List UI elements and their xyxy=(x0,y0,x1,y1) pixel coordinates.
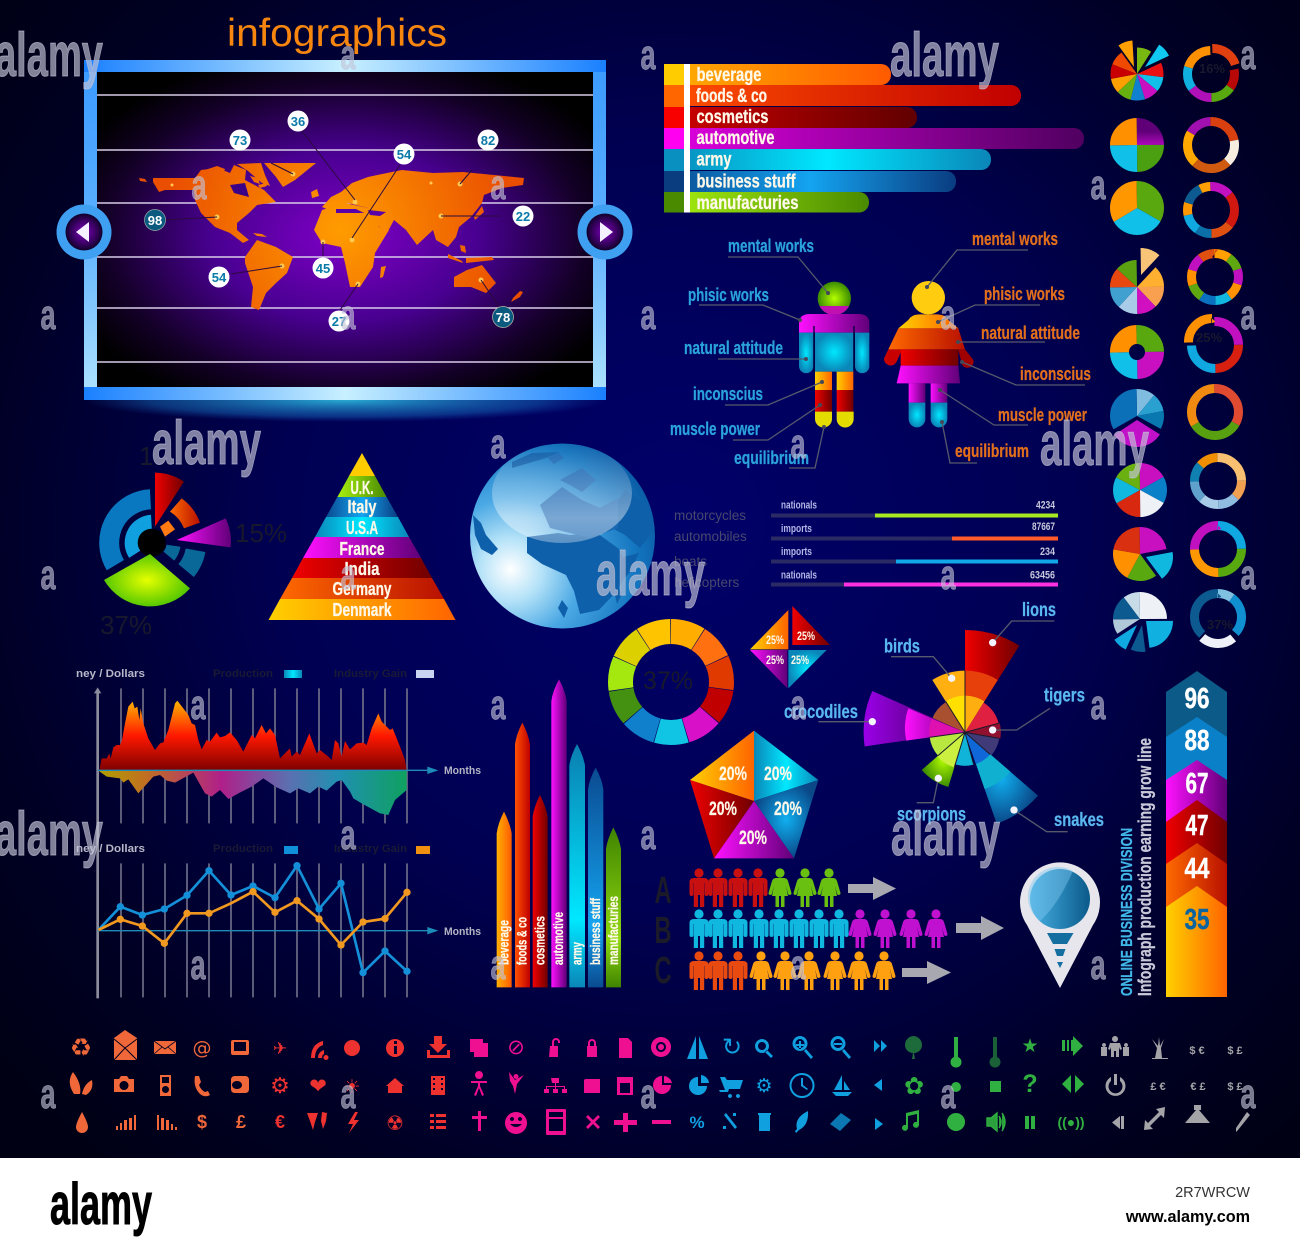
badges: 82 xyxy=(481,133,495,148)
diamond chart: 25% xyxy=(766,653,784,667)
pyramid chart: Germany xyxy=(332,579,392,599)
icon: dollar pound: $ £ xyxy=(1227,1045,1243,1057)
pyramid chart: India xyxy=(344,559,380,579)
donut 5: 25% xyxy=(1196,330,1222,345)
icon: document xyxy=(619,1038,632,1058)
icon: arrow right xyxy=(1062,1036,1083,1056)
watermarks: a xyxy=(1240,291,1256,338)
progress bars: helicopters xyxy=(674,575,740,590)
rainbow donut xyxy=(620,632,722,732)
icon: stop xyxy=(990,1081,1001,1092)
pie 2 xyxy=(1124,132,1150,158)
spear bar chart: foods & co xyxy=(514,917,530,965)
rose chart: crocodiles xyxy=(784,702,858,723)
badges: 78 xyxy=(496,310,510,325)
icon: dollar: $ xyxy=(197,1112,207,1132)
area chart: Production xyxy=(213,668,273,680)
watermarks: a xyxy=(490,681,506,728)
footer strip xyxy=(0,1158,1300,1251)
pie column xyxy=(1120,54,1160,638)
icon: camera xyxy=(114,1076,134,1092)
figure: man xyxy=(670,236,869,468)
icon: feather xyxy=(795,1111,808,1133)
icon: clock xyxy=(790,1073,815,1098)
icon: calendar xyxy=(617,1077,633,1095)
row C xyxy=(690,951,951,990)
icon: arrow right small xyxy=(875,1118,883,1130)
watermarks: a xyxy=(490,941,506,988)
title: infographics xyxy=(227,12,447,55)
icon: arrow back xyxy=(1112,1116,1124,1129)
area chart: Months xyxy=(444,765,481,777)
people pictogram xyxy=(654,868,1004,992)
figure: man: mental works xyxy=(728,236,814,256)
icon: diagonal arrow xyxy=(1144,1107,1165,1130)
donut 1: 16% xyxy=(1199,61,1225,76)
icon: radiation: ☢ xyxy=(386,1111,404,1135)
watermarks: a xyxy=(190,681,206,728)
icon: lock xyxy=(587,1039,597,1057)
progress bars: 234 xyxy=(1040,546,1056,558)
spear bar chart: beverage xyxy=(496,920,512,965)
pentagon chart: 20% xyxy=(719,764,747,785)
pyramid chart: U.S.A xyxy=(346,518,378,538)
icon: help: ? xyxy=(1022,1070,1038,1098)
pentagon chart: 20% xyxy=(709,799,737,820)
diamond chart: 25% xyxy=(766,633,784,647)
figure: woman: natural attitude xyxy=(981,323,1080,343)
horizontal bar chart: automotive xyxy=(696,128,774,149)
rose chart: scorpions xyxy=(897,804,966,826)
badges: 45 xyxy=(316,261,330,276)
icon: heart: ❤ xyxy=(309,1074,327,1098)
icon: grid tiles xyxy=(830,1113,851,1131)
watermarks: a xyxy=(40,551,56,598)
badges xyxy=(144,110,534,332)
watermarks: alamy xyxy=(0,21,103,90)
icon: list xyxy=(430,1114,446,1129)
spear bar chart: automotive xyxy=(551,912,566,965)
pie 5 xyxy=(1120,334,1154,370)
horizontal bar chart: manufacturies xyxy=(696,193,798,214)
pyramid chart: U.K. xyxy=(350,478,374,498)
icon: chart down xyxy=(157,1115,177,1130)
rainbow donut: 37% xyxy=(643,667,693,695)
rose chart: lions xyxy=(1022,600,1056,621)
pie 1 xyxy=(1121,54,1158,87)
rose chart: tigers xyxy=(1044,686,1085,706)
watermarks: a xyxy=(790,681,806,728)
donut 4 xyxy=(1192,254,1238,300)
progress bars: 63456 xyxy=(1030,570,1055,582)
donut 9 xyxy=(1194,594,1242,644)
icon: copy xyxy=(470,1039,488,1057)
icon: left right xyxy=(1062,1075,1084,1093)
people pictogram: A xyxy=(654,870,672,912)
badges: 54 xyxy=(212,270,227,285)
pentagon chart: 20% xyxy=(739,828,767,849)
chevron stack: 96 xyxy=(1184,683,1210,715)
watermarks: a xyxy=(940,291,956,338)
icon: broadcast: ((●)) xyxy=(1057,1114,1085,1130)
donut 7 xyxy=(1194,458,1242,504)
icon: gear: ⚙ xyxy=(270,1074,290,1099)
icon: target xyxy=(651,1037,671,1057)
pie 8 xyxy=(1126,540,1160,570)
icon: pause xyxy=(1025,1116,1035,1129)
watermarks: a xyxy=(640,811,656,858)
icon: dollar euro: $ € xyxy=(1189,1045,1205,1057)
watermarks: alamy xyxy=(891,800,1000,869)
icon: people xyxy=(1101,1036,1129,1057)
icon: bolt xyxy=(348,1112,359,1133)
donut 6 xyxy=(1192,388,1238,436)
icon: lamp xyxy=(1185,1105,1210,1123)
figure: woman: muscle power xyxy=(998,405,1087,425)
icon: screen xyxy=(231,1040,249,1055)
donut 1 xyxy=(1188,48,1236,98)
icon: music player xyxy=(160,1075,171,1096)
watermarks: a xyxy=(190,941,206,988)
watermarks: a xyxy=(490,161,506,208)
diamond chart: 25% xyxy=(797,629,815,643)
icon: phone xyxy=(195,1076,210,1096)
icon: dollar pound 2: $ £ xyxy=(1227,1081,1243,1093)
watermarks: a xyxy=(340,811,356,858)
icon: search xyxy=(755,1039,773,1058)
watermarks: a xyxy=(1240,1070,1256,1117)
horizontal bar chart: cosmetics xyxy=(696,107,768,128)
chevron stack: 67 xyxy=(1186,768,1208,800)
icon: dancer xyxy=(509,1072,524,1094)
icon: flower: ✿ xyxy=(904,1072,924,1100)
progress bars: nationals xyxy=(781,570,817,582)
icon: music xyxy=(902,1110,919,1131)
icon: zoom in xyxy=(793,1036,813,1059)
watermarks: a xyxy=(40,291,56,338)
icon: globe xyxy=(344,1040,360,1056)
icon: refresh: ↻ xyxy=(722,1033,742,1061)
badges: 54 xyxy=(397,147,412,162)
line chart xyxy=(76,843,481,997)
exploded radial chart xyxy=(93,441,287,640)
watermarks: a xyxy=(640,1070,656,1117)
figure: man: phisic works xyxy=(688,285,769,305)
people pictogram: C xyxy=(654,950,672,992)
icon: plane: ✈ xyxy=(273,1039,287,1059)
exploded radial chart: 1 xyxy=(139,441,153,471)
donut 5 xyxy=(1188,318,1238,368)
icon: pound: £ xyxy=(236,1112,246,1132)
icon: euro: € xyxy=(275,1112,285,1132)
watermarks: a xyxy=(940,551,956,598)
icon: at sign: @ xyxy=(192,1037,212,1059)
figure: man: inconscius xyxy=(693,384,763,404)
icon: sun: ☀ xyxy=(343,1076,361,1098)
badges: 27 xyxy=(332,314,346,329)
icon: pen xyxy=(1236,1112,1250,1132)
horizontal bar chart xyxy=(664,64,1084,214)
badges: 73 xyxy=(233,133,247,148)
chevron stack: ONLINE BUSINESS DIVISION xyxy=(1119,828,1136,996)
icon: recycle: ♻ xyxy=(70,1033,92,1062)
icon: leaves xyxy=(70,1072,92,1095)
watermarks: alamy xyxy=(0,800,103,869)
watermarks: a xyxy=(1090,681,1106,728)
donut column xyxy=(1188,48,1242,644)
icon: water drop xyxy=(76,1112,88,1133)
watermarks: a xyxy=(1240,551,1256,598)
figure: man: muscle power xyxy=(670,419,760,439)
icon set xyxy=(70,1030,1250,1135)
pie 6 xyxy=(1124,402,1150,434)
spear bar chart: army xyxy=(570,942,584,965)
chevron stack: 35 xyxy=(1184,904,1210,936)
area chart xyxy=(76,668,481,998)
icon: film strip xyxy=(431,1076,445,1095)
watermarks: a xyxy=(192,161,207,208)
chevron stack: 44 xyxy=(1184,853,1210,885)
pie 3 xyxy=(1124,194,1150,222)
figure: woman: inconscius xyxy=(1020,364,1091,384)
watermarks: a xyxy=(940,1070,956,1117)
watermarks: a xyxy=(1090,941,1106,988)
footer strip: 2R7WRCW xyxy=(1175,1185,1250,1201)
people pictogram: B xyxy=(654,910,672,952)
icon: open envelope xyxy=(114,1030,137,1060)
icon: cart xyxy=(719,1077,743,1098)
icon: rss xyxy=(311,1041,329,1060)
icon: cross xyxy=(472,1111,487,1131)
watermarks: a xyxy=(1240,31,1256,78)
pyramid chart: Denmark xyxy=(332,600,392,620)
watermarks: a xyxy=(340,551,356,598)
icon: star: ★ xyxy=(1021,1035,1039,1057)
progress bars: imports xyxy=(781,523,812,535)
progress bars: 4234 xyxy=(1036,500,1056,512)
icon: dot xyxy=(951,1082,961,1092)
button: next xyxy=(578,204,632,260)
icon: folder xyxy=(584,1079,600,1093)
icon: power xyxy=(1106,1074,1126,1096)
icon: gears: ⚙ xyxy=(755,1075,773,1097)
icon: plus xyxy=(614,1113,637,1132)
pentagon chart xyxy=(690,731,818,858)
horizontal bar chart: foods & co xyxy=(696,86,767,107)
icon: pound euro: £ € xyxy=(1150,1081,1166,1093)
panel: world map xyxy=(56,60,632,422)
figure: woman xyxy=(884,229,1091,463)
watermarks: a xyxy=(790,420,806,467)
icon: envelope xyxy=(154,1041,176,1054)
progress bars: 87667 xyxy=(1032,521,1055,533)
horizontal bar chart: army xyxy=(696,150,732,170)
icon: disc xyxy=(947,1113,965,1131)
watermarks: a xyxy=(40,1070,56,1117)
donut 9: 37% xyxy=(1207,617,1233,632)
watermarks: a xyxy=(340,31,356,78)
icon: chat xyxy=(231,1076,249,1093)
icon: pie chart xyxy=(689,1075,709,1095)
pie 7 xyxy=(1126,476,1154,504)
icon: chart up xyxy=(116,1115,136,1130)
figure: woman: mental works xyxy=(972,229,1058,249)
globe xyxy=(470,443,655,628)
badges: 22 xyxy=(516,209,530,224)
watermarks: a xyxy=(340,1070,356,1117)
chevron stack xyxy=(1119,671,1227,997)
watermarks: alamy xyxy=(1040,410,1149,479)
icon: speaker xyxy=(987,1113,1005,1131)
icon: sitemap xyxy=(544,1078,567,1093)
icon: jar xyxy=(758,1113,771,1131)
pentagon chart: 20% xyxy=(774,799,802,820)
row B xyxy=(690,909,1004,948)
area chart: ney / Dollars xyxy=(76,668,145,680)
line chart: Months xyxy=(444,926,481,938)
icon: percent: % xyxy=(689,1113,705,1132)
spear bar chart: cosmetics xyxy=(532,916,548,965)
diamond chart: 25% xyxy=(791,653,809,667)
spear bar chart: manufacturies xyxy=(606,896,621,965)
rose chart: birds xyxy=(884,636,920,658)
watermarks: a xyxy=(640,291,656,338)
watermarks: alamy xyxy=(890,21,999,90)
figure: woman: phisic works xyxy=(984,284,1065,304)
map points xyxy=(170,172,484,286)
icon: arrow triangles xyxy=(687,1036,708,1059)
progress bars: nationals xyxy=(781,500,817,512)
line chart: Production xyxy=(213,843,273,855)
footer strip: alamy xyxy=(50,1172,152,1237)
icon: zoom out xyxy=(831,1036,851,1059)
spear bar chart: business stuff xyxy=(588,898,603,965)
watermarks: alamy xyxy=(596,540,705,609)
button: previous xyxy=(56,204,112,260)
rose chart: snakes xyxy=(1054,810,1104,831)
spear bar chart xyxy=(496,679,621,987)
row A xyxy=(690,868,896,907)
pie 9 xyxy=(1124,606,1160,638)
chevron stack: Infograph production earning grow line xyxy=(1135,738,1155,996)
line chart: ney / Dollars xyxy=(76,843,145,855)
figure: woman: equilibrium xyxy=(955,441,1029,461)
icon: open lock xyxy=(549,1038,560,1057)
icon: thermometer xyxy=(950,1037,961,1068)
progress bars: boats xyxy=(674,554,707,569)
icon: close xyxy=(586,1115,600,1129)
icon: thermometer outline xyxy=(990,1037,1000,1068)
watermarks: a xyxy=(640,31,656,78)
icon: fast forward xyxy=(874,1040,887,1052)
badges: 36 xyxy=(291,114,305,129)
icon: euro pound: € £ xyxy=(1190,1081,1206,1093)
rose chart xyxy=(784,600,1104,832)
progress bars xyxy=(674,500,1058,590)
area chart: Industry Gain xyxy=(334,668,407,680)
horizontal bar chart: business stuff xyxy=(696,172,796,192)
continents xyxy=(139,163,524,310)
progress bars: automobiles xyxy=(674,529,747,544)
horizontal bar chart: beverage xyxy=(696,65,762,86)
pyramid chart: Italy xyxy=(348,497,376,517)
watermarks: a xyxy=(490,420,506,467)
chevron stack: 88 xyxy=(1184,725,1210,757)
map pin xyxy=(1020,862,1100,988)
icon: sailboat xyxy=(832,1075,852,1096)
donut 2 xyxy=(1188,122,1234,168)
icon: pie xyxy=(653,1076,672,1094)
pie 4 xyxy=(1124,262,1154,300)
donut 8 xyxy=(1194,526,1242,572)
icon: tools xyxy=(723,1113,737,1129)
icon: arrow left small xyxy=(874,1079,882,1091)
exploded radial chart: 37% xyxy=(100,610,152,640)
icon: stick figure xyxy=(471,1071,487,1096)
icon: download xyxy=(427,1036,450,1058)
icon: smiley xyxy=(505,1112,527,1134)
watermarks: a xyxy=(790,941,806,988)
pentagon chart: 20% xyxy=(764,764,792,785)
icon: calculator xyxy=(546,1109,566,1135)
watermarks: a xyxy=(340,291,356,338)
chevron stack: 47 xyxy=(1186,810,1208,842)
donut 3 xyxy=(1188,186,1234,234)
progress bars: motorcycles xyxy=(674,508,746,523)
diamond chart xyxy=(750,606,830,688)
figure: man: equilibrium xyxy=(734,448,809,468)
footer strip: www.alamy.com xyxy=(1125,1208,1250,1226)
watermarks: alamy xyxy=(152,409,261,478)
pyramid chart: France xyxy=(340,539,384,559)
icon: bare tree xyxy=(1152,1037,1168,1059)
icon: no sign: ⊘ xyxy=(507,1035,525,1059)
line chart: Industry Gain xyxy=(334,843,407,855)
watermarks: a xyxy=(1090,161,1106,208)
pyramid chart xyxy=(268,453,456,620)
icon: tree xyxy=(905,1036,922,1059)
figure: man: natural attitude xyxy=(684,338,783,358)
badges: 98 xyxy=(148,213,162,228)
progress bars: imports xyxy=(781,546,812,558)
icon: minus xyxy=(652,1120,671,1124)
icon: house xyxy=(386,1078,404,1093)
icon: info xyxy=(386,1039,404,1057)
exploded radial chart: 15% xyxy=(235,518,287,548)
icon: world xyxy=(307,1112,327,1130)
